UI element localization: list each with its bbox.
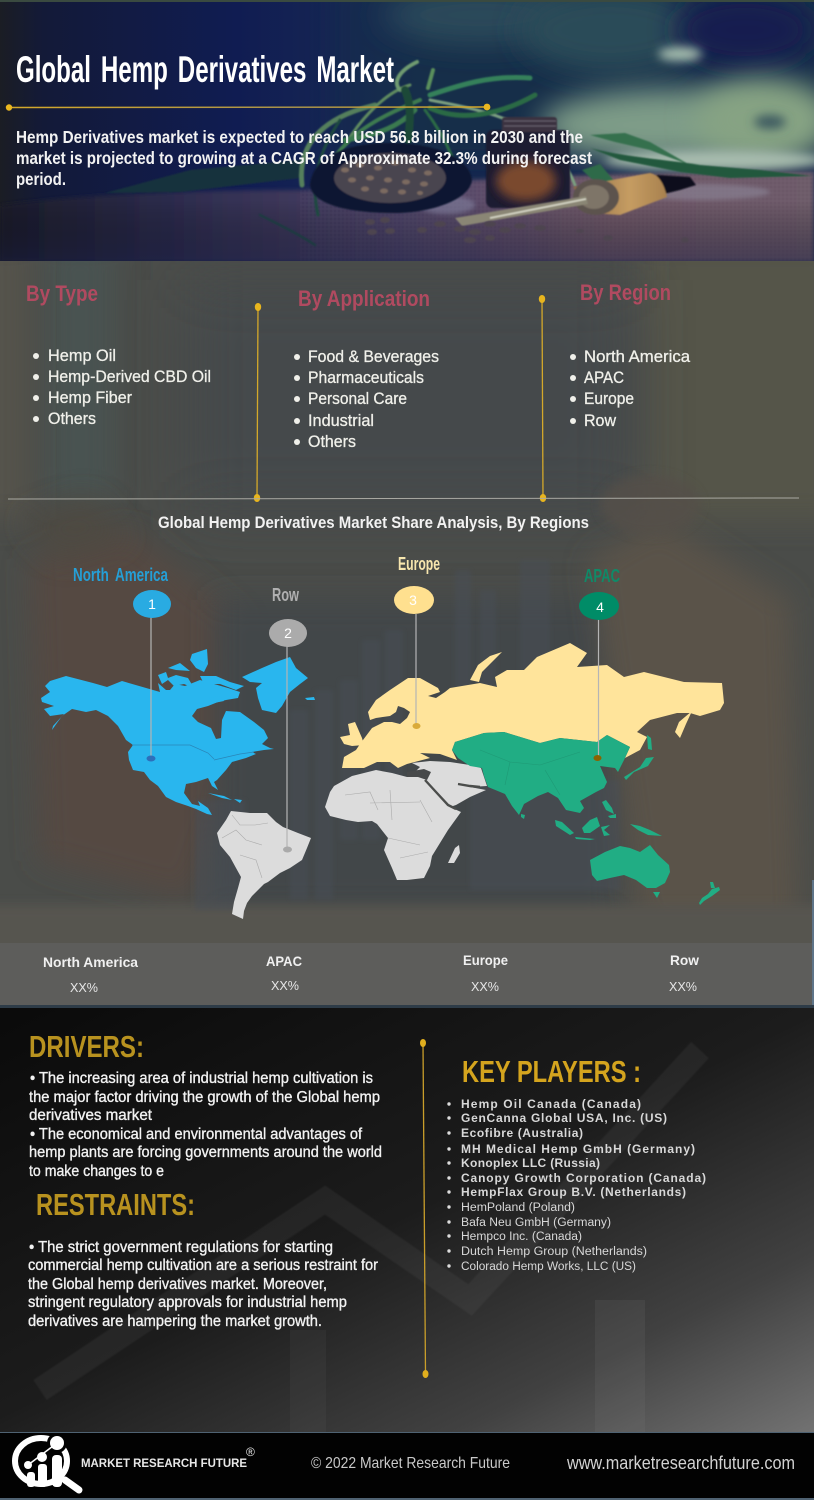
marker: row: Row (272, 585, 300, 605)
list: type segments: Hemp-Derived CBD Oil (48, 367, 211, 386)
marker: europe: 3 (409, 592, 417, 608)
map region: north america (41, 649, 315, 815)
marker: north america: North America (73, 565, 169, 585)
world map (41, 643, 724, 919)
list: application segments (294, 347, 439, 451)
panel: restraints (28, 1187, 378, 1330)
list: type segments (33, 346, 211, 428)
list: type segments: Hemp Fiber (48, 388, 132, 407)
text: drivers body: hemp plants are forcing governments around the world (29, 1144, 382, 1161)
share row: europe: Europe (463, 952, 508, 968)
map region: rest of world (217, 761, 487, 919)
panel: by application (294, 286, 439, 451)
list: key players: Hempco Inc. (Canada) (461, 1231, 582, 1243)
list: key players: HemPoland (Poland) (461, 1202, 575, 1214)
list: application segments: Others (308, 432, 356, 451)
icon: market research future logo (15, 1433, 79, 1490)
text: restraints body: commercial hemp cultivation are a serious restraint for (28, 1257, 378, 1274)
share row: north america: North America (43, 954, 138, 970)
list: application segments: Food & Beverages (308, 347, 439, 366)
text: drivers body: • The economical and environmental advantages of (30, 1126, 363, 1143)
hero photo: hemp plant, seeds and oil bottle (0, 0, 814, 262)
text: drivers body: the major factor driving the growth of the Global hemp (29, 1089, 380, 1106)
text: restraints body: • The strict government regulations for starting (29, 1239, 333, 1256)
list: type segments: Hemp Oil (48, 346, 116, 365)
heading: key players: KEY PLAYERS : (462, 1054, 641, 1089)
share row: apac (266, 953, 302, 993)
marker: north america: 1 (148, 596, 156, 612)
website url: www.marketresearchfuture.com (566, 1453, 795, 1473)
brand name: MARKET RESEARCH FUTURE (81, 1456, 247, 1470)
list: key players: Canopy Growth Corporation (Canada) (461, 1171, 706, 1185)
share row: row: Row (670, 952, 699, 968)
marker: row: 2 (284, 625, 292, 641)
list: application segments: Pharmaceuticals (308, 368, 424, 387)
share row: apac: XX% (271, 978, 299, 993)
hero divider line (6, 104, 490, 111)
list: region segments: North America (584, 347, 691, 366)
hero description: Hemp Derivatives market is expected to reach USD 56.8 billion in 2030 and the (16, 127, 583, 147)
dropper cap and glass (455, 173, 696, 226)
heading: by type: By Type (26, 281, 98, 306)
divider: type and application (254, 303, 261, 502)
panel: by region (570, 280, 691, 430)
map region: asia pacific (452, 732, 720, 905)
panel: key players (447, 1054, 706, 1273)
text: drivers body: to make changes to e (29, 1163, 164, 1180)
marker: row (269, 585, 307, 852)
list: region segments: Europe (584, 389, 634, 408)
list: application segments: Industrial (308, 411, 374, 430)
marker: europe: Europe (398, 554, 440, 574)
text: drivers body: • The increasing area of industrial hemp cultivation is (30, 1070, 373, 1087)
share row: row (669, 952, 699, 994)
list: key players (447, 1097, 706, 1273)
marker: apac: 4 (596, 599, 604, 615)
share row: europe (463, 952, 508, 994)
list: key players: GenCanna Global USA, Inc. (US) (461, 1111, 667, 1125)
marker: apac: APAC (584, 566, 620, 586)
heading: by application: By Application (298, 286, 430, 311)
list: key players: Ecofibre (Australia) (461, 1126, 583, 1140)
list: type segments: Others (48, 409, 96, 428)
hero title: Global Hemp Derivatives Market (16, 49, 394, 90)
market overview panel background (0, 240, 814, 1005)
list: key players: HempFlax Group B.V. (Netherlands) (461, 1185, 686, 1199)
seed bowl (310, 143, 472, 213)
panel: by type (26, 281, 211, 428)
list: key players: Konoplex LLC (Russia) (461, 1156, 600, 1170)
dark leaves on the right (582, 133, 812, 182)
share row: europe: XX% (471, 979, 499, 994)
divider: application and region (539, 295, 546, 502)
heading: by region: By Region (580, 280, 671, 305)
share row: north america (43, 954, 138, 995)
divider: drivers and key players (420, 1039, 428, 1378)
share row: row: XX% (669, 979, 697, 994)
list: key players: Colorado Hemp Works, LLC (US) (461, 1261, 636, 1273)
heading: market share analysis: Global Hemp Derivatives Market Share Analysis, By Regions (158, 514, 589, 532)
registered mark: ® (246, 1445, 255, 1459)
plant fronds (260, 62, 575, 245)
hero description: period. (16, 169, 66, 189)
heading: drivers: DRIVERS: (29, 1029, 144, 1064)
marker: europe (394, 554, 440, 729)
list: application segments: Personal Care (308, 389, 407, 408)
marker: apac (579, 566, 620, 761)
footer bar (0, 1432, 814, 1500)
text: restraints body: stringent regulatory approvals for industrial hemp (28, 1294, 347, 1311)
text: restraints body (28, 1239, 378, 1330)
oil bottle (486, 117, 570, 208)
map region: europe and russia (340, 643, 724, 768)
hero description: market is projected to growing at a CAGR of Approximate 32.3% during forecast (16, 148, 592, 168)
text: restraints body: derivatives are hampering the market growth. (28, 1313, 322, 1330)
list: key players: Hemp Oil Canada (Canada) (461, 1097, 641, 1111)
text: restraints body: the Global hemp derivatives market. Moreover, (28, 1276, 327, 1293)
copyright: © 2022 Market Research Future (311, 1455, 510, 1472)
panel: drivers (29, 1029, 382, 1180)
list: key players: Dutch Hemp Group (Netherlands) (461, 1246, 647, 1258)
hero description (16, 127, 592, 189)
share row: north america: XX% (70, 980, 98, 995)
list: region segments: APAC (584, 368, 624, 387)
text: drivers body: derivatives market (29, 1107, 153, 1124)
heading: restraints: RESTRAINTS: (36, 1187, 195, 1222)
list: region segments (570, 347, 691, 430)
list: region segments: Row (584, 411, 617, 430)
text: drivers body (29, 1070, 382, 1180)
scattered seeds (365, 217, 689, 243)
marker: north america (73, 565, 171, 762)
dark panel background: drivers, restraints, key players (0, 1005, 814, 1432)
list: key players: Bafa Neu GmbH (Germany) (461, 1217, 611, 1229)
share row: apac: APAC (266, 953, 302, 969)
list: key players: MH Medical Hemp GmbH (Germany) (461, 1142, 695, 1156)
map region: greenland (242, 657, 308, 713)
